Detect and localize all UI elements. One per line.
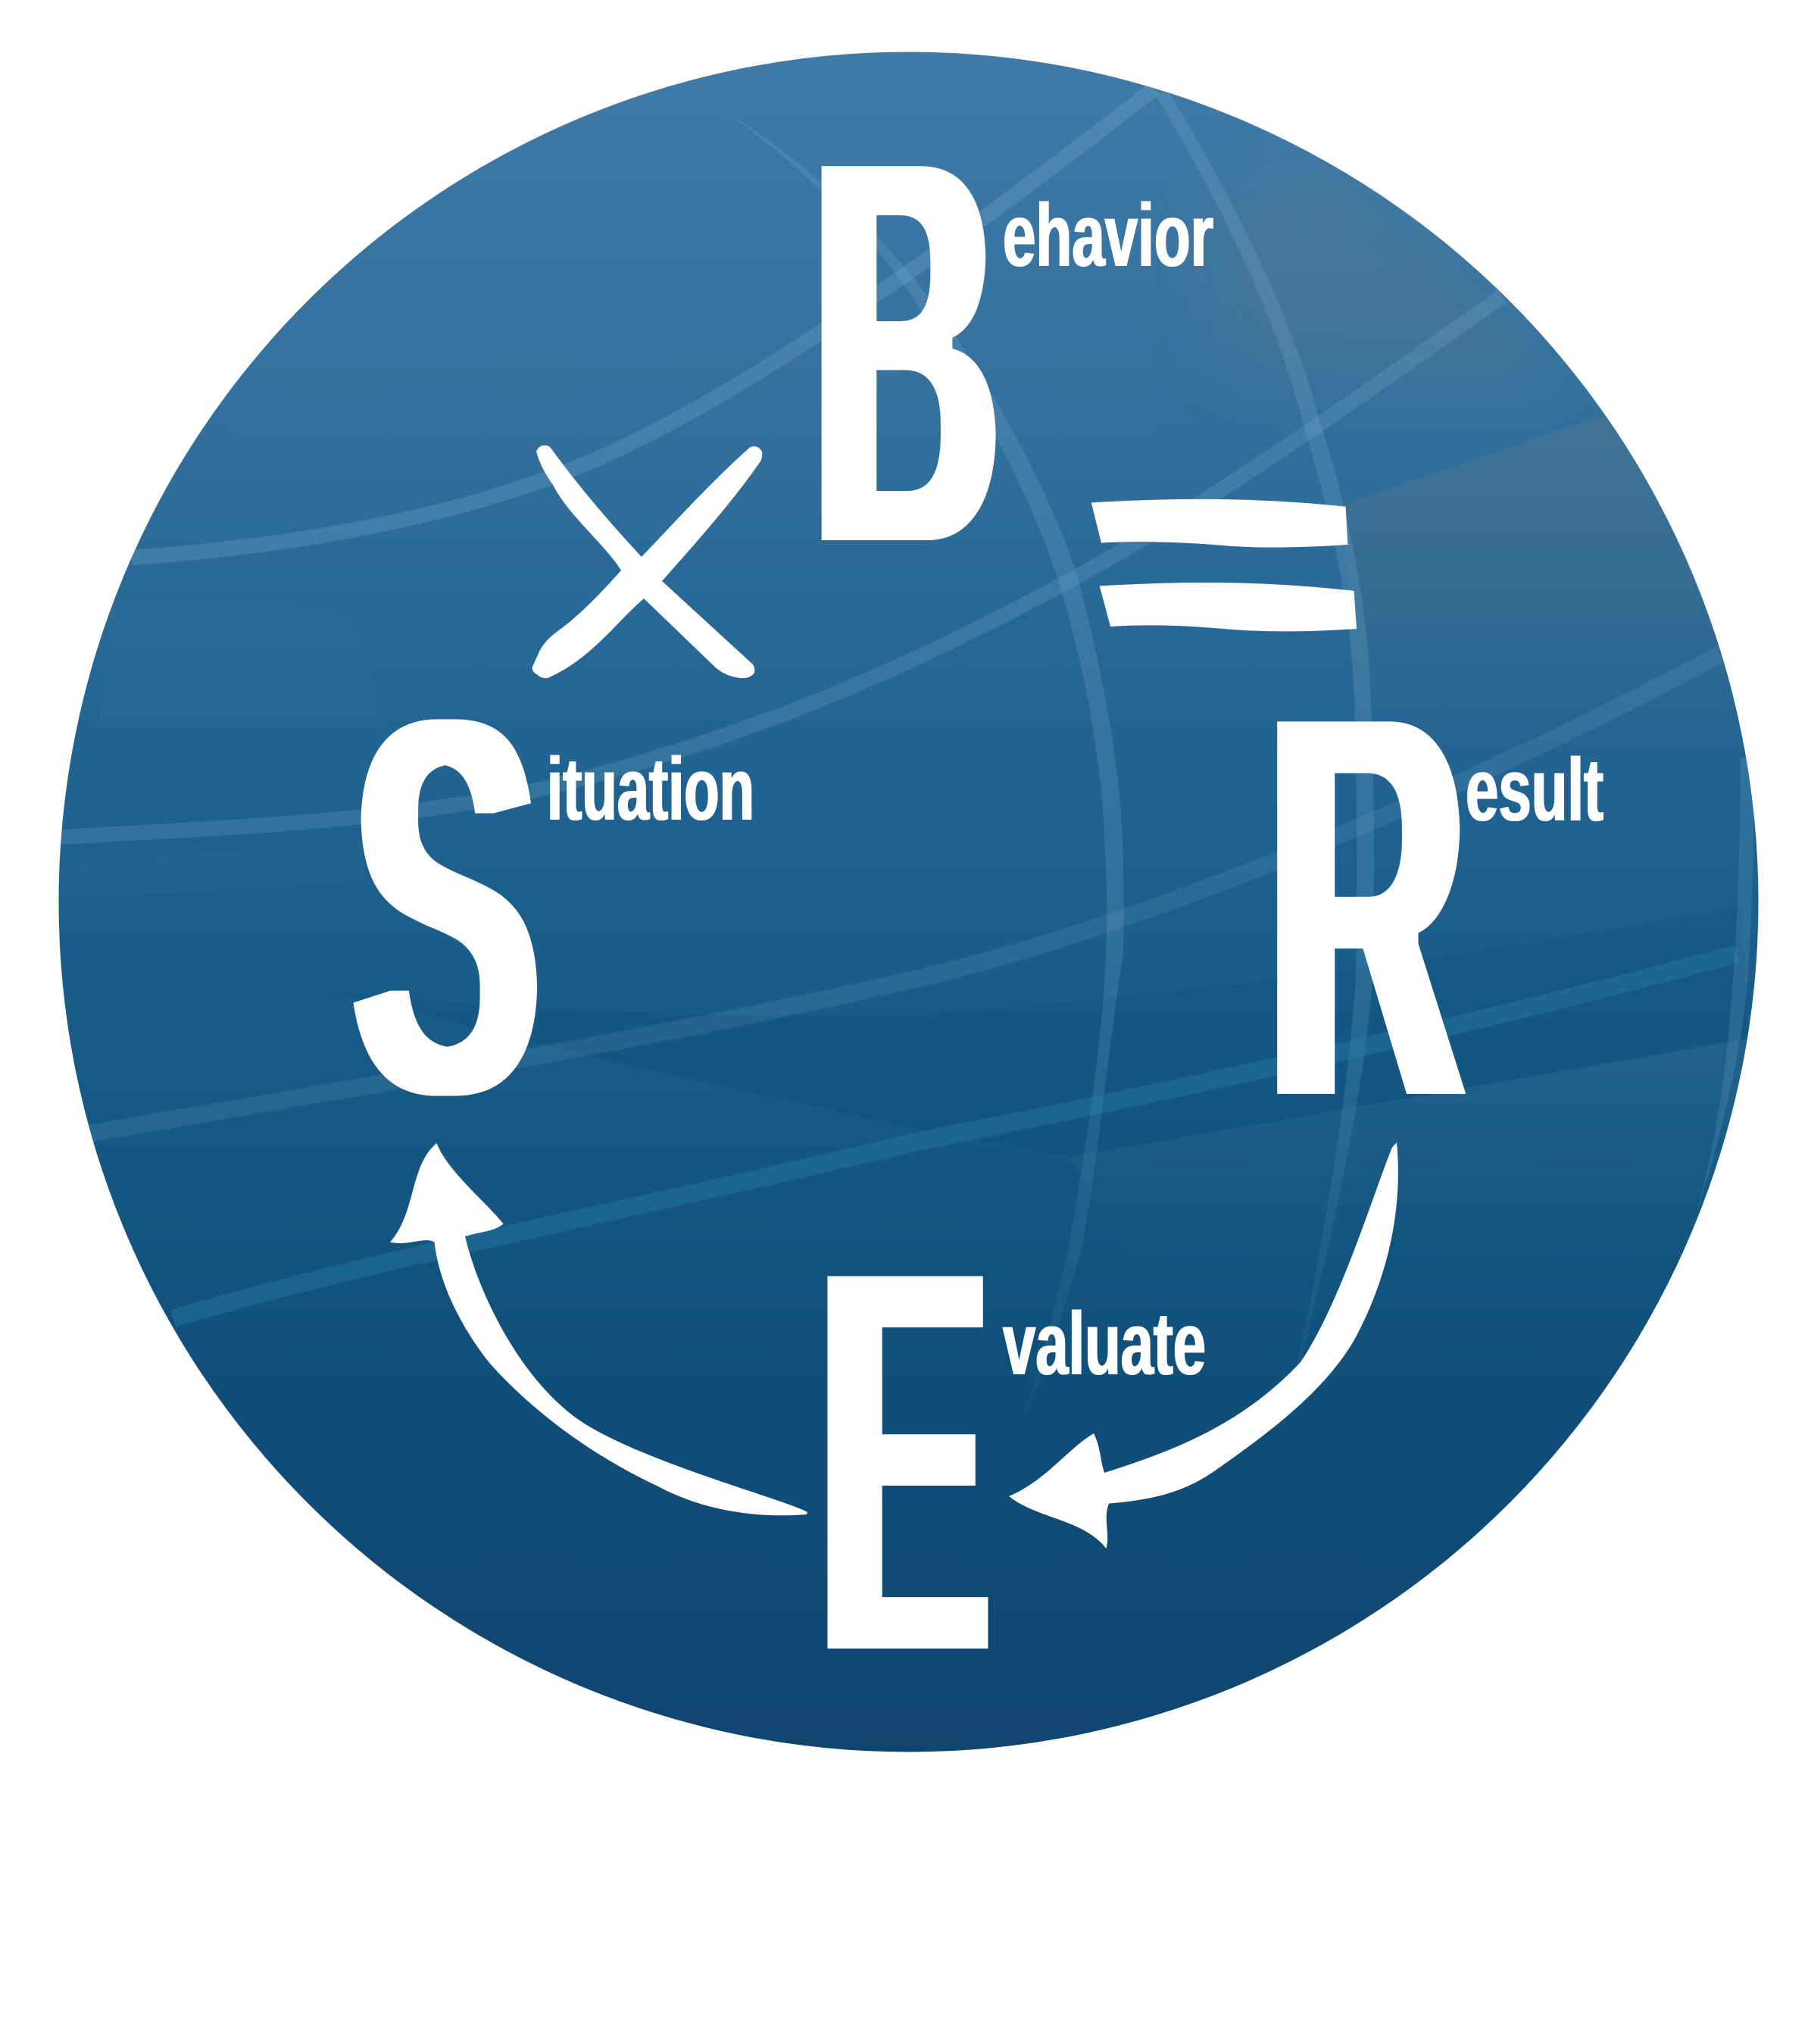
icon: multiplication sign [532,445,762,678]
label: ehavior: ehavior [1003,186,1213,286]
heading letter: R: R [1268,595,1466,1217]
globe latitude and longitude lines [61,89,1769,1481]
arrow: evaluate back to situation [390,1143,807,1515]
label: valuate: valuate [1003,1294,1206,1394]
arrow: result to evaluate [1009,1142,1398,1549]
heading letter: B: B [813,39,998,664]
heading letter: S: S [353,602,539,1212]
heading letter: E: E [820,1151,989,1773]
icon: equals sign [1091,499,1357,631]
label: esult: esult [1466,740,1603,840]
panel: blue globe disc [59,52,1759,1752]
label: ituation: ituation [547,739,754,839]
